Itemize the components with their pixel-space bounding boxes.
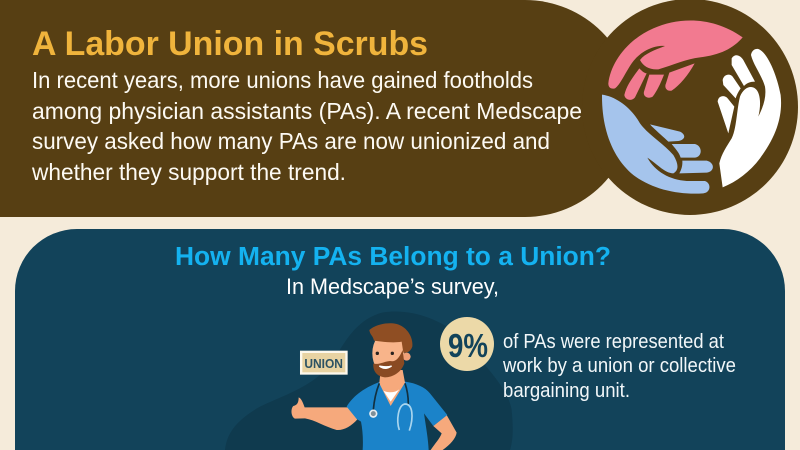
panel: header banner	[0, 0, 798, 217]
intro text: whether they support the trend.	[31, 159, 346, 185]
callout: 9 percent	[440, 317, 494, 371]
icon: blue hand	[602, 95, 713, 194]
title: A Labor Union in Scrubs	[32, 25, 428, 63]
callout: 9 percent: 9%	[448, 327, 488, 364]
icon: three joined hands	[602, 20, 781, 194]
intro text	[31, 67, 582, 185]
callout text: bargaining unit.	[503, 379, 630, 402]
intro text: In recent years, more unions have gained footholds	[32, 67, 533, 93]
scrubs	[347, 382, 447, 450]
callout text: work by a union or collective	[502, 354, 736, 377]
heading: How Many PAs Belong to a Union?	[175, 243, 611, 271]
intro text: survey asked how many PAs are now unionized and	[32, 128, 550, 154]
subheading: In Medscape’s survey,	[286, 274, 499, 299]
intro text: among physician assistants (PAs). A recent Medscape	[32, 98, 582, 124]
stethoscope	[370, 383, 412, 431]
panel: union membership	[15, 229, 785, 450]
illustration: nurse with union sign	[225, 311, 513, 450]
callout text	[502, 330, 736, 402]
head	[372, 331, 404, 375]
union sign: UNION	[304, 356, 343, 371]
union sign	[300, 351, 348, 375]
icon: pink hand	[608, 20, 743, 100]
icon: white hand	[718, 49, 781, 187]
callout text: of PAs were represented at	[503, 330, 724, 353]
neck and collar	[379, 370, 405, 406]
arm with thumb up	[291, 397, 357, 430]
